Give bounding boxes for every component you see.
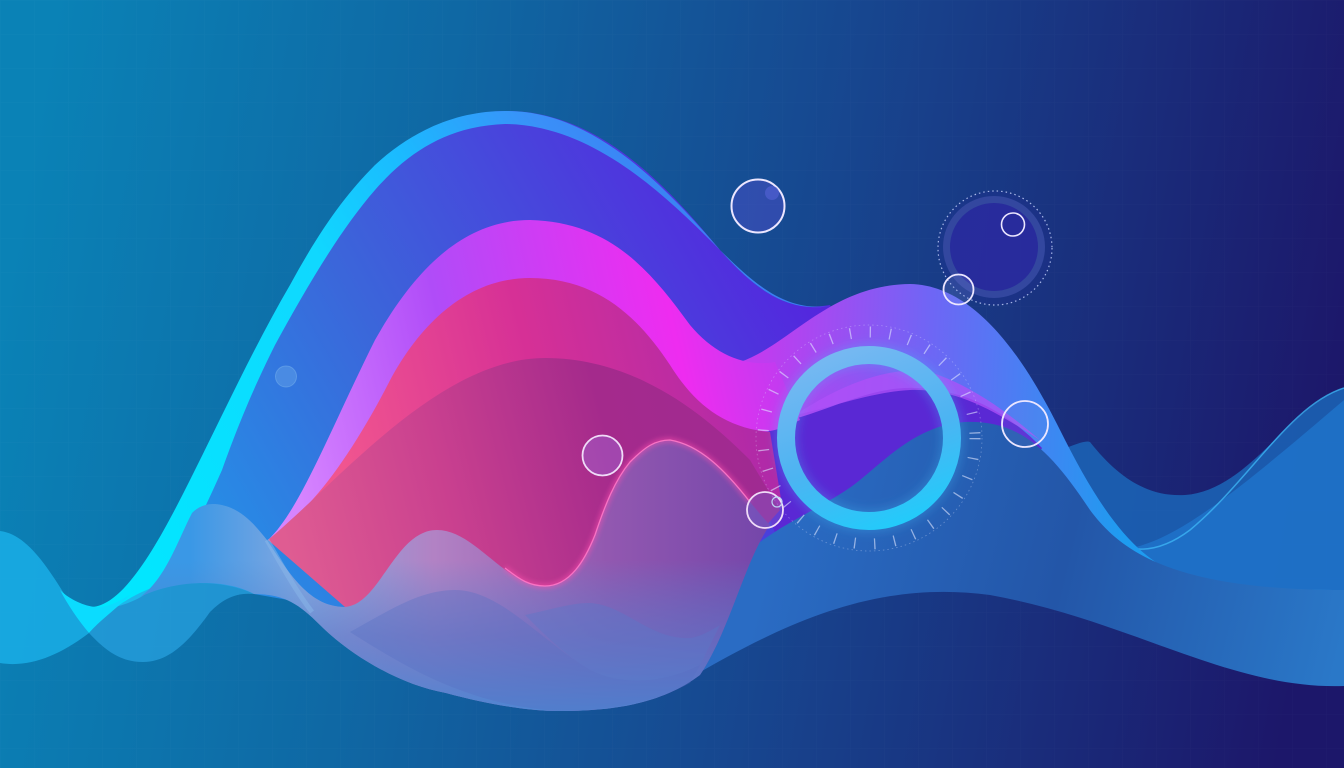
wave: second cyan lobe — [89, 578, 254, 662]
wave: front wave — [140, 440, 770, 711]
wave: darker inner pink hump — [268, 358, 780, 607]
wave: left cyan lobe — [0, 531, 89, 664]
bubble: faint left — [276, 366, 296, 387]
gauge: tick dial — [756, 325, 982, 551]
wave: main blue hump with cyan edge — [92, 111, 900, 640]
bubble: center — [582, 436, 622, 476]
wave: inner purple body — [730, 388, 1042, 570]
wave: pink glowing edge — [505, 440, 750, 586]
wave: right back wave — [1060, 388, 1344, 592]
wave: cyan crossing highlight — [60, 590, 130, 633]
wave: right hump — [740, 284, 1344, 592]
wave: blue lower band — [695, 422, 1344, 686]
bubble: top — [732, 180, 784, 232]
dial: dotted circle with ring — [938, 191, 1052, 305]
wave: pink hump — [268, 278, 782, 600]
gauge: glowing ring — [786, 355, 952, 521]
bubble: on hump crest — [944, 274, 974, 304]
bubble: small inside dial — [1002, 213, 1024, 236]
wave: lower translucent humps — [350, 590, 720, 711]
wave: magenta band — [268, 220, 800, 540]
wave: pale magenta crest inside ring — [795, 371, 1040, 440]
bubble: right — [1002, 401, 1048, 447]
bubble: lower near ring — [747, 492, 783, 528]
